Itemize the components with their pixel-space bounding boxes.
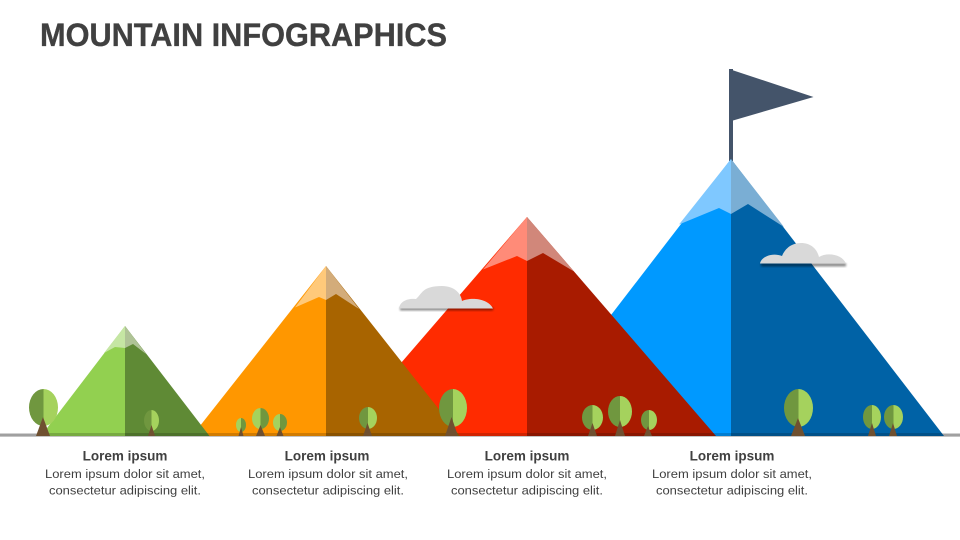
flag: [729, 69, 814, 161]
tree 5: [273, 414, 287, 436]
caption 3: [447, 448, 607, 498]
caption 2: Lorem ipsum: [285, 448, 369, 464]
tree 10: [641, 410, 657, 436]
title: MOUNTAIN INFOGRAPHICS: [40, 17, 447, 53]
tree 1: [29, 389, 58, 436]
tree 2: [144, 410, 159, 436]
tree 13: [884, 405, 903, 436]
tree 9: [608, 396, 632, 436]
tree 11: [784, 389, 813, 436]
caption 3: Lorem ipsum: [485, 448, 569, 464]
caption 4: consectetur adipiscing elit.: [656, 484, 808, 498]
cloud right: [760, 243, 846, 266]
tree 7: [439, 389, 467, 436]
mountain: green: [41, 326, 210, 436]
caption 1: [45, 448, 205, 498]
caption 3: consectetur adipiscing elit.: [451, 484, 603, 498]
caption 1: Lorem ipsum dolor sit amet,: [45, 467, 205, 481]
tree 3: [236, 418, 246, 436]
caption 3: Lorem ipsum dolor sit amet,: [447, 467, 607, 481]
caption 1: consectetur adipiscing elit.: [49, 484, 201, 498]
caption 2: Lorem ipsum dolor sit amet,: [248, 467, 408, 481]
caption 4: Lorem ipsum: [690, 448, 774, 464]
cloud left: [399, 286, 493, 310]
caption 4: [652, 448, 812, 498]
mountain: red: [338, 217, 716, 436]
mountain: orange: [192, 266, 460, 436]
caption 4: Lorem ipsum dolor sit amet,: [652, 467, 812, 481]
ground line: [0, 434, 960, 437]
tree 6: [359, 407, 377, 436]
caption 2: [248, 448, 408, 498]
tree 12: [863, 405, 881, 436]
tree 4: [252, 408, 269, 436]
caption 2: consectetur adipiscing elit.: [252, 484, 404, 498]
mountain: blue: [518, 159, 944, 436]
tree 8: [582, 405, 603, 436]
ground shadow over mountains: [0, 433, 960, 436]
caption 1: Lorem ipsum: [83, 448, 167, 464]
